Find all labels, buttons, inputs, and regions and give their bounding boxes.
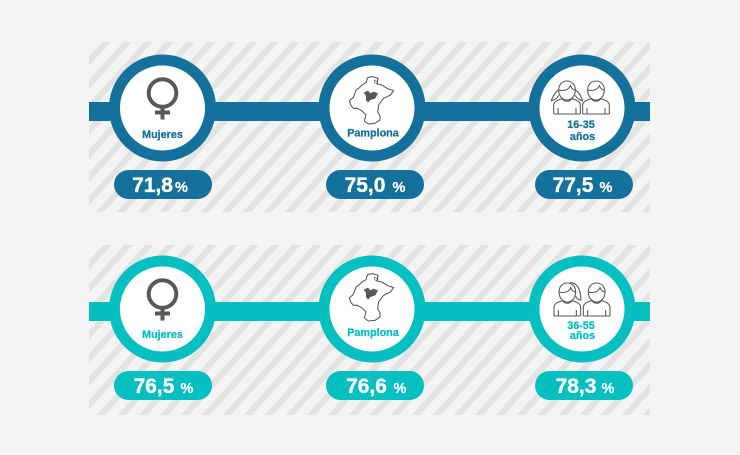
icon: Navarra map (349, 77, 394, 124)
badge: 36-55 años (534, 261, 630, 357)
badge: Pamplona (324, 60, 420, 156)
badge: Pamplona (324, 261, 420, 357)
value pill: 71,8 % (114, 170, 212, 199)
value pill: 78,3 %: % (602, 381, 615, 397)
connector bar (89, 302, 650, 321)
value pill: 78,3 % (535, 371, 633, 400)
value pill: 75,0 % (326, 170, 424, 199)
badge: Mujeres: Mujeres (142, 129, 183, 141)
icon: girl and boy (551, 81, 609, 114)
badge: 16-35 años (534, 60, 630, 156)
badge: Mujeres (114, 60, 210, 156)
badge: 16-35 años: años (570, 131, 595, 143)
value pill: 77,5 %: % (600, 180, 613, 196)
value pill: 76,5 %: 76,5 (134, 375, 175, 398)
icon: Navarra map (349, 274, 394, 321)
icon: female symbol (149, 79, 176, 120)
value pill: 76,6 %: % (394, 381, 407, 397)
value pill: 75,0 %: 75,0 (345, 174, 385, 197)
value pill: 78,3 %: 78,3 (556, 375, 596, 398)
badge: Mujeres: Mujeres (142, 329, 183, 341)
badge: 36-55 años: 36-55 (567, 320, 595, 332)
badge: Mujeres (114, 261, 210, 357)
value pill: 76,6 %: 76,6 (346, 375, 387, 398)
value pill: 77,5 % (535, 170, 633, 199)
value pill: 71,8 %: % (175, 180, 188, 196)
value pill: 77,5 %: 77,5 (553, 174, 594, 197)
badge: 16-35 años: 16-35 (567, 119, 595, 131)
value pill: 76,5 % (114, 371, 212, 400)
value pill: 71,8 %: 71,8 (132, 174, 173, 197)
icon: woman and man (554, 283, 610, 316)
value pill: 75,0 %: % (393, 180, 406, 196)
connector bar (89, 102, 650, 121)
panel: top row, blue (89, 42, 650, 212)
badge: 36-55 años: años (570, 330, 595, 342)
value pill: 76,6 % (326, 371, 424, 400)
icon: female symbol (149, 280, 176, 320)
badge: Pamplona: Pamplona (347, 128, 400, 140)
panel: bottom row, teal (89, 245, 650, 415)
badge: Pamplona: Pamplona (347, 327, 400, 339)
value pill: 76,5 %: % (181, 381, 194, 397)
